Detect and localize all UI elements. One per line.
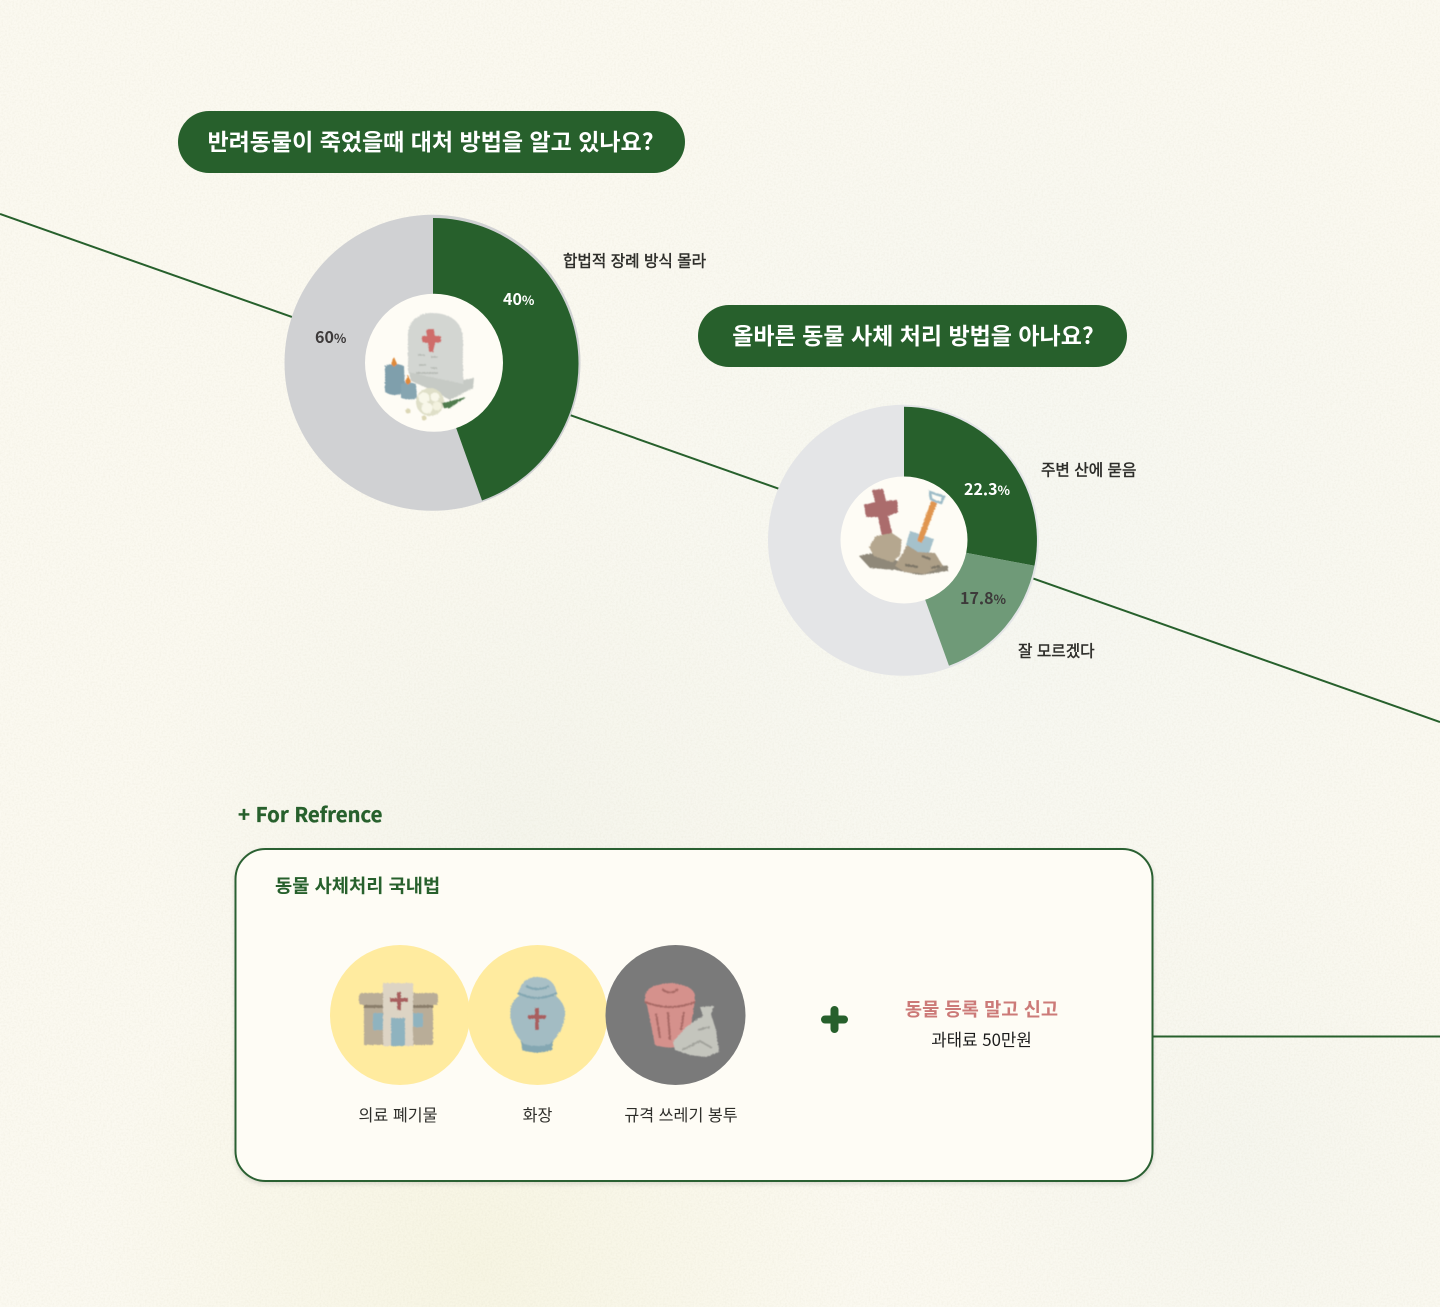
center circle bbox=[840, 476, 968, 604]
caption: 의료 폐기물: 의료 폐기물 bbox=[358, 1102, 438, 1126]
icon: hospital on yellow circle bbox=[330, 945, 470, 1085]
icon: plus bbox=[825, 1010, 844, 1029]
icon: urn on yellow circle bbox=[468, 945, 608, 1085]
icon: grave with cross and shovel bbox=[859, 489, 948, 575]
diagonal connector line bbox=[0, 214, 1440, 722]
donut chart: disposal method awareness bbox=[768, 405, 1039, 676]
label: 합법적 장례 방식 몰라: 합법적 장례 방식 몰라 bbox=[563, 248, 706, 272]
label: 잘 모르겠다: 잘 모르겠다 bbox=[1018, 638, 1095, 662]
center circle bbox=[365, 294, 503, 432]
value: 60%: 60% bbox=[315, 324, 347, 348]
icon: tombstone with candles and flowers bbox=[385, 313, 474, 420]
value: 22.3%: 22.3% bbox=[964, 476, 1011, 500]
heading pill: second question bbox=[698, 305, 1127, 367]
slice: 17.8% bbox=[904, 541, 1034, 666]
connector line from reference box bbox=[1150, 1036, 1440, 1038]
heading pill: first question bbox=[178, 111, 685, 173]
heading pill: second question: 올바른 동물 사체 처리 방법을 아나요? bbox=[732, 317, 1094, 351]
caption: 규격 쓰레기 봉투: 규격 쓰레기 봉투 bbox=[624, 1102, 738, 1126]
label: 주변 산에 묻음: 주변 산에 묻음 bbox=[1041, 458, 1136, 480]
slice: 40% bbox=[433, 218, 578, 500]
panel heading: 동물 사체처리 국내법 bbox=[275, 872, 440, 898]
panel: domestic law on animal remains bbox=[236, 849, 1152, 1181]
warning: penalty text bbox=[905, 995, 1058, 1051]
icon: trash can and bag on gray circle bbox=[606, 945, 746, 1085]
warning: penalty text: 과태료 50만원 bbox=[931, 1027, 1032, 1051]
heading pill: first question: 반려동물이 죽었을때 대처 방법을 알고 있나요? bbox=[207, 123, 654, 157]
caption: 화장: 화장 bbox=[523, 1102, 552, 1126]
heading: For Refrence: + For Refrence bbox=[238, 798, 382, 828]
value: 17.8%: 17.8% bbox=[960, 585, 1007, 609]
slice: 60% bbox=[284, 215, 580, 511]
slice: remainder bbox=[768, 405, 1039, 676]
donut chart: funeral method awareness bbox=[284, 215, 580, 511]
warning: penalty text: 동물 등록 말고 신고 bbox=[905, 995, 1058, 1022]
value: 40%: 40% bbox=[503, 286, 535, 310]
slice: 22.3% bbox=[904, 407, 1037, 566]
